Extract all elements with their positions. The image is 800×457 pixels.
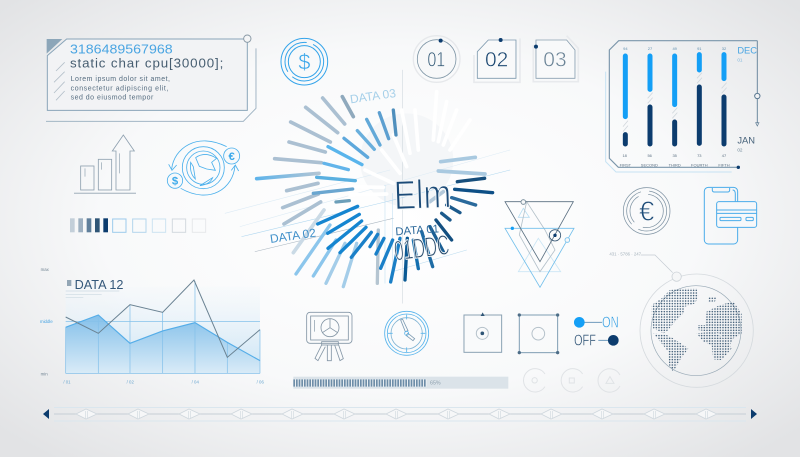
panel: code readout: static char cpu[30000]; bbox=[70, 56, 223, 71]
chart: data 12 area chart bbox=[40, 267, 264, 385]
icon: target square bbox=[464, 312, 502, 352]
panel: dec to jan bar chart: JAN bbox=[737, 135, 755, 145]
badge: 02 bbox=[474, 38, 520, 82]
badge: 01: 01 bbox=[427, 48, 445, 72]
chart: data 12 area chart: min bbox=[41, 371, 48, 376]
icon: globe with currency exchange bbox=[167, 141, 240, 195]
icon: euro coin: € bbox=[639, 196, 655, 227]
toggle: on and off: OFF bbox=[574, 333, 596, 350]
panel: dec to jan bar chart: FIFTH bbox=[718, 163, 730, 168]
panel: code readout bbox=[46, 35, 256, 121]
chart: data 12 area chart: / 06 bbox=[257, 380, 264, 385]
burst sub heading: 01DDC bbox=[392, 229, 451, 267]
progress bar bbox=[293, 377, 508, 389]
chart: data 12 area chart: / 01 bbox=[63, 380, 71, 385]
icon: clock bbox=[385, 311, 429, 355]
globe with dotted continents bbox=[609, 251, 753, 387]
chart: data 12 area chart: middle bbox=[40, 319, 53, 324]
panel: dec to jan bar chart: 27 bbox=[648, 46, 653, 51]
badge: 01 bbox=[413, 36, 460, 82]
chart: radial burst bbox=[225, 70, 510, 303]
globe with dotted continents: 431 · 5786 · 247 bbox=[609, 251, 642, 256]
label: data 02: DATA 02 bbox=[269, 226, 317, 246]
icon: growth bars with arrow bbox=[74, 135, 136, 193]
icon: globe with currency exchange: € bbox=[228, 151, 235, 163]
panel: dec to jan bar chart: 32 bbox=[722, 46, 727, 51]
panel: dec to jan bar chart: THIRD bbox=[669, 163, 681, 168]
panel: dec to jan bar chart: 56 bbox=[647, 153, 653, 158]
panel: dec to jan bar chart: FIRST bbox=[620, 163, 632, 168]
badge: 02: 02 bbox=[485, 48, 508, 72]
toggle: on and off bbox=[574, 315, 619, 350]
pale shape icons bbox=[524, 369, 620, 392]
grey rays bbox=[257, 97, 353, 253]
progress bar: 65% bbox=[430, 381, 441, 387]
panel: dec to jan bar chart: 49 bbox=[672, 46, 678, 51]
pale lower rays bbox=[296, 225, 378, 287]
icon: dollar coin: $ bbox=[298, 50, 310, 75]
panel: dec to jan bar chart: 91 bbox=[697, 46, 702, 51]
strong blue rays bbox=[318, 178, 493, 282]
burst heading: Elm bbox=[393, 170, 452, 218]
panel: dec to jan bar chart: 73 bbox=[697, 153, 702, 158]
panel: dec to jan bar chart: FOURTH bbox=[691, 163, 708, 168]
icon: euro coin bbox=[623, 188, 670, 234]
icon: nested triangles bbox=[505, 200, 574, 287]
panel: dec to jan bar chart: 01 bbox=[737, 57, 743, 62]
pale right rays bbox=[430, 157, 485, 202]
construction lines bbox=[225, 70, 510, 303]
panel: dec to jan bar chart: 35 bbox=[672, 153, 678, 158]
chart: data 12 area chart: DATA 12 bbox=[75, 278, 123, 292]
icon: phone with card bbox=[704, 187, 757, 244]
icon: dollar coin bbox=[281, 38, 328, 85]
timeline slider bbox=[43, 408, 757, 421]
badge: 03: 03 bbox=[543, 48, 567, 72]
panel: dec to jan bar chart: 02 bbox=[737, 147, 743, 152]
icon: presentation easel bbox=[307, 312, 352, 361]
label: data 03: DATA 03 bbox=[349, 86, 397, 106]
panel: dec to jan bar chart: 94 bbox=[623, 46, 628, 51]
panel: code readout: Lorem ipsum dolor sit amet, bbox=[71, 76, 170, 83]
chart: data 12 area chart: max bbox=[41, 267, 50, 272]
label: data 01: DATA 01 bbox=[395, 223, 439, 238]
icon: globe with currency exchange: $ bbox=[172, 176, 179, 188]
toggle: on and off: ON bbox=[602, 315, 619, 332]
panel: dec to jan bar chart bbox=[606, 41, 760, 172]
swatch row bbox=[70, 218, 206, 232]
panel: code readout: sed do eiusmod tempor bbox=[71, 95, 154, 102]
panel: code readout: consectetur adipiscing elit, bbox=[71, 85, 168, 92]
chart: data 12 area chart: / 02 bbox=[127, 380, 134, 385]
panel: dec to jan bar chart: 47 bbox=[722, 153, 727, 158]
panel: code readout: 3186489567968 bbox=[70, 43, 173, 57]
panel: dec to jan bar chart: DEC bbox=[737, 46, 757, 56]
white rays bbox=[347, 92, 470, 195]
icon: node square bbox=[518, 313, 559, 354]
panel: dec to jan bar chart: 18 bbox=[622, 153, 628, 158]
panel: dec to jan bar chart: SECOND bbox=[641, 163, 658, 168]
badge: 03 bbox=[533, 36, 578, 82]
chart: data 12 area chart: / 04 bbox=[192, 380, 199, 385]
mid blue rays bbox=[313, 110, 396, 202]
